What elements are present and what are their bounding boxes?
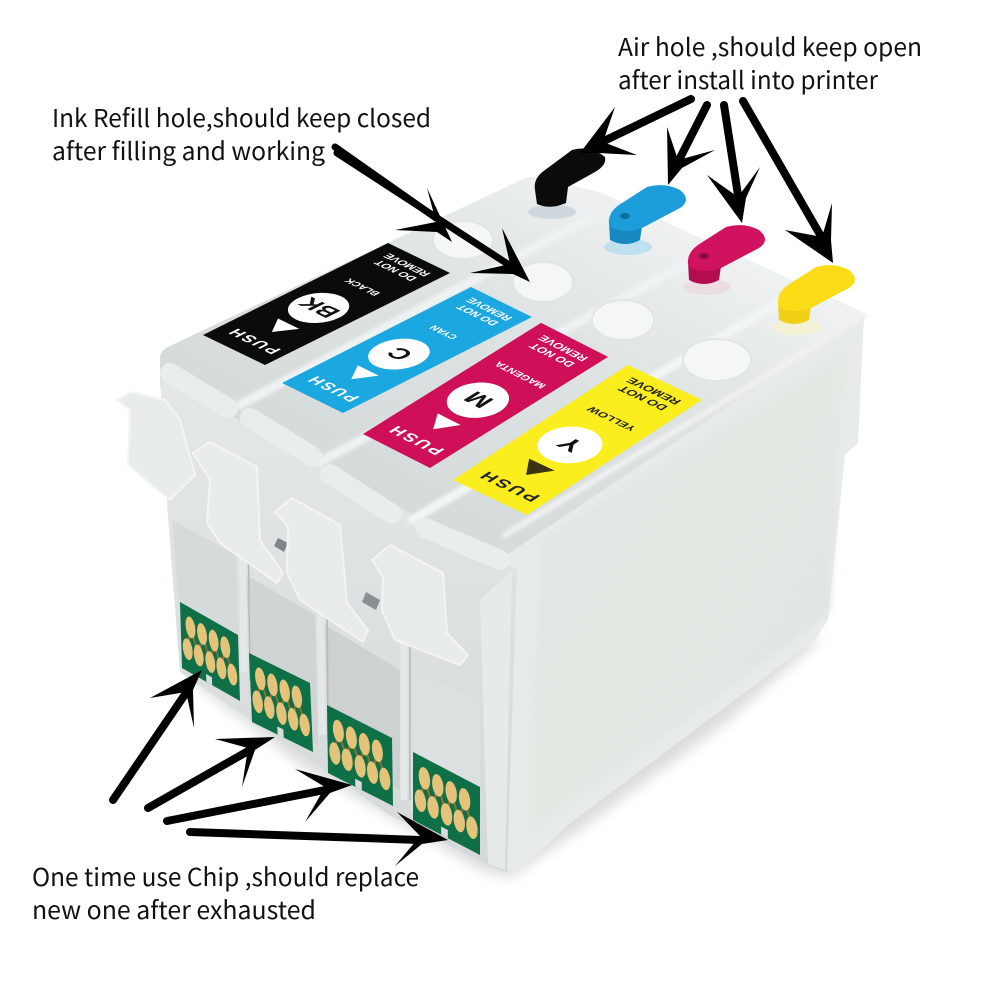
label: cyan: REMOVE [464, 296, 516, 322]
right face inner panel [530, 352, 843, 838]
arrows: air hole [580, 99, 833, 263]
chip: cyan [249, 653, 313, 752]
label: yellow: PUSH [474, 468, 544, 504]
caption: air hole: after install into printer [618, 62, 878, 97]
label: magenta: DO NOT [527, 341, 578, 368]
label: black: BLACK [343, 277, 383, 297]
caption: ink refill hole [52, 100, 431, 168]
caption: ink refill hole: Ink Refill hole,should keep closed [52, 100, 431, 135]
arrow to cyan refill hole [337, 153, 530, 282]
label: magenta [363, 323, 608, 468]
arrows: ink refill hole [335, 147, 530, 282]
cap: cyan [604, 185, 686, 255]
arrow to yellow cap [743, 101, 833, 263]
label: yellow: DO NOT [614, 384, 671, 412]
ink refill holes [433, 221, 751, 381]
cap: magenta [683, 225, 765, 295]
label: magenta: M [458, 388, 500, 412]
arrow to magenta cap [707, 105, 760, 223]
ground shadow [190, 630, 820, 878]
label: magenta: PUSH [383, 422, 449, 458]
caption: chip: One time use Chip ,should replace [32, 859, 419, 894]
arrow to black chip [113, 670, 202, 800]
label: cyan: PUSH [303, 373, 364, 403]
label: yellow: YELLOW [584, 404, 639, 432]
front face [160, 378, 517, 872]
arrow to black cap [580, 99, 691, 155]
arrows: chips [113, 670, 448, 866]
caption: ink refill hole: after filling and working [52, 133, 325, 168]
label: black: PUSH [224, 326, 285, 356]
label: yellow: REMOVE [623, 376, 684, 406]
right face [492, 316, 864, 872]
cartridge set [117, 149, 864, 878]
caption: chip: new one after exhausted [32, 892, 316, 927]
label: yellow: Y [551, 433, 591, 456]
label: black: DO NOT [371, 258, 420, 282]
cap: black [528, 149, 605, 219]
arrow to cyan cap [667, 105, 715, 185]
label: black: REMOVE [381, 252, 434, 277]
label: magenta: REMOVE [536, 333, 591, 362]
top surface [160, 177, 864, 570]
label: cyan [282, 287, 532, 413]
caption: air hole [618, 29, 922, 97]
chip: yellow [413, 752, 480, 855]
label: cyan: DO NOT [454, 303, 502, 327]
caption: air hole: Air hole ,should keep open [618, 29, 922, 64]
front lips of cartridges [170, 373, 500, 560]
chip: magenta [327, 705, 393, 806]
arrow to black refill hole [335, 147, 452, 242]
label: yellow [453, 365, 702, 515]
caps: air hole plugs [528, 149, 855, 335]
clip tabs [117, 392, 468, 665]
label: black [203, 243, 450, 365]
ridges on top surface [240, 218, 864, 535]
cap: yellow [773, 265, 855, 335]
caption: chip [32, 859, 419, 927]
arrow to cyan chip [148, 737, 275, 808]
front panels [172, 500, 512, 870]
arrow to magenta chip [167, 769, 352, 822]
label: magenta: MAGENTA [492, 359, 549, 389]
label: cyan: C [380, 344, 420, 363]
label: black: BK [293, 294, 347, 320]
arrow to yellow chip [190, 812, 448, 866]
chip: black [180, 602, 240, 701]
label: cyan: CYAN [427, 324, 461, 340]
